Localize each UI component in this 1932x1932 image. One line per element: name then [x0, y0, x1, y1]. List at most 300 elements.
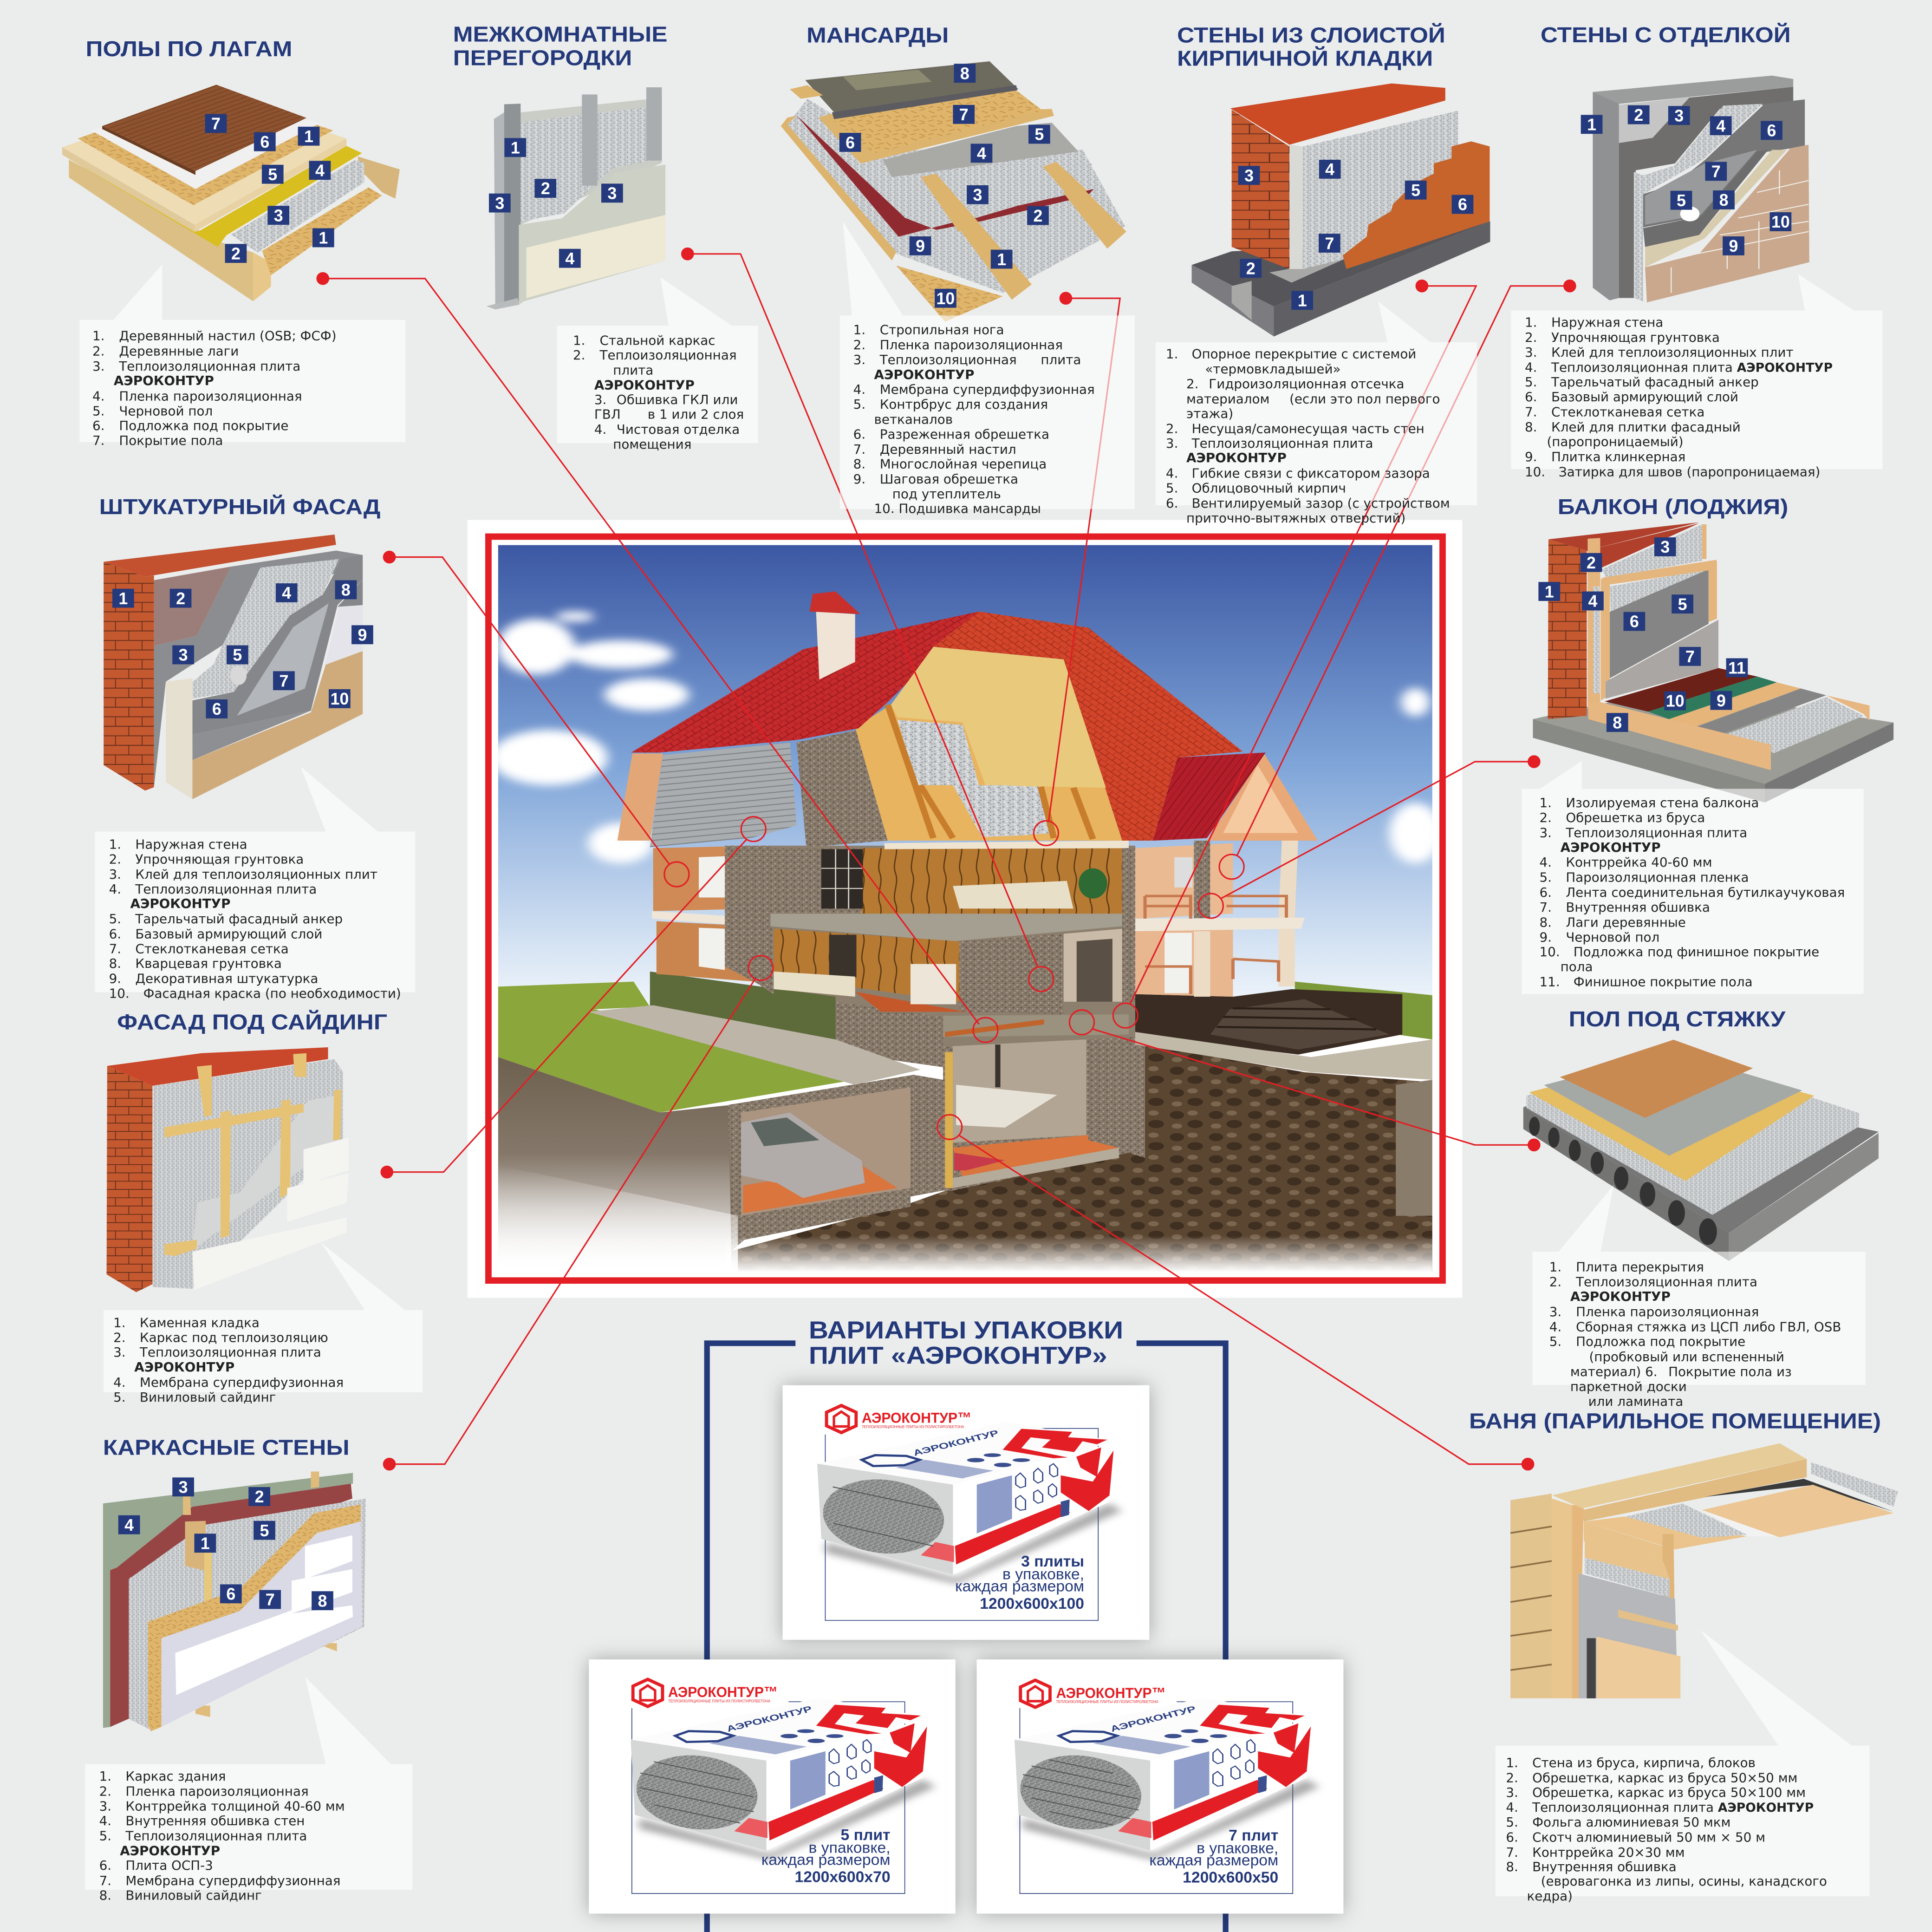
callout legend: 6.	[99, 1858, 111, 1873]
card: 7 плит: 1200x600x50	[1183, 1869, 1278, 1886]
layer number badges: 2	[541, 179, 550, 198]
layer number badges: 8	[960, 64, 969, 83]
heading	[1177, 23, 1445, 70]
connector: мансарды	[1034, 293, 1120, 845]
callout legend: 9.	[853, 471, 865, 487]
card: 3 плиты: каждая размером	[955, 1577, 1084, 1595]
card: 5 плит: АЭРОКОНТУР™	[668, 1684, 778, 1700]
callout legend: 6.	[1525, 389, 1537, 405]
layer number badges: 7	[279, 672, 288, 690]
callout legend: 4.	[113, 1375, 126, 1390]
callout legend: 5.	[1506, 1815, 1518, 1830]
layer number badges: 3	[973, 186, 982, 204]
callout legend: Вентилируемый зазор (с устройством	[1192, 496, 1450, 511]
callout legend: 6.	[853, 427, 865, 442]
callout legend: 3.	[853, 352, 865, 367]
layer number badges: 3	[495, 194, 504, 213]
callout legend: АЭРОКОНТУР	[874, 367, 974, 382]
callout legend: Подложка под финишное покрытие	[1574, 944, 1819, 959]
panel: пол под стяжку	[1523, 1007, 1879, 1409]
callout legend: 8.	[109, 956, 121, 971]
callout legend: 7.	[99, 1873, 111, 1888]
layer number badges: 1	[1298, 291, 1307, 310]
callout legend: 9.	[1540, 929, 1552, 945]
callout legend: Фасадная краска (по необходимости)	[143, 986, 401, 1001]
callout legend: 2.	[1186, 376, 1198, 392]
callout legend: Разреженная обрешетка	[880, 427, 1049, 442]
callout legend: Контррейка толщиной 40-60 мм	[125, 1798, 345, 1814]
callout legend	[557, 277, 758, 452]
callout legend: Подложка под покрытие	[119, 418, 288, 433]
heading: МЕЖКОМНАТНЫЕ	[453, 22, 668, 46]
callout legend: под утеплитель	[892, 486, 1001, 502]
callout legend: или ламината	[1588, 1394, 1683, 1409]
callout legend: Упрочняющая грунтовка	[1551, 330, 1720, 345]
callout legend: 3.	[113, 1345, 126, 1360]
layer number badges: 5	[1034, 125, 1044, 144]
callout legend	[1532, 1185, 1866, 1409]
connector: баня	[937, 1115, 1534, 1470]
callout legend	[95, 767, 415, 1001]
layer number badges: 5	[233, 646, 242, 665]
callout legend: 5.	[109, 911, 121, 927]
layer number badges: 10	[330, 690, 349, 708]
layer number badges: 7	[1685, 647, 1695, 666]
callout legend: 1.	[1540, 795, 1552, 810]
layer number badges: 2	[1634, 106, 1643, 124]
card: 5 плит: 5 плит	[841, 1826, 891, 1844]
callout legend: 4.	[1506, 1800, 1518, 1815]
panel: варианты упаковки	[589, 1317, 1343, 1932]
callout legend: АЭРОКОНТУР	[130, 896, 230, 911]
callout legend: (если это пол первого	[1289, 392, 1440, 407]
callout legend: 5.	[1549, 1334, 1561, 1349]
callout legend: 6.	[1166, 496, 1178, 511]
callout legend: Теплоизоляционная плита	[118, 359, 300, 374]
callout legend: кедра)	[1527, 1888, 1573, 1904]
callout legend: 3.	[92, 359, 105, 374]
callout legend: паркетной доски	[1570, 1379, 1687, 1394]
card: 7 плит	[977, 1659, 1343, 1913]
callout legend: АЭРОКОНТУР	[1718, 1801, 1814, 1815]
callout legend: 3.	[109, 867, 121, 882]
callout legend: Теплоизоляционная плита	[1575, 1274, 1757, 1289]
connector: межкомнатные перегородки	[682, 248, 1054, 992]
callout legend: 3.	[1166, 436, 1178, 451]
callout legend: Контрбрус для создания	[880, 397, 1048, 412]
layer number badges	[1581, 105, 1791, 255]
callout legend: 7.	[92, 433, 105, 448]
heading: КИРПИЧНОЙ КЛАДКИ	[1177, 46, 1433, 70]
house cutaway picture	[490, 545, 1441, 1272]
callout legend: АЭРОКОНТУР	[1186, 450, 1287, 465]
callout legend	[1511, 274, 1882, 479]
layer number badges: 1	[118, 589, 128, 608]
callout legend: Клей для теплоизоляционных плит	[1551, 345, 1794, 360]
callout legend: приточно-вытяжных отверстий)	[1186, 510, 1405, 526]
layer number badges: 6	[846, 133, 855, 152]
callout legend: плита	[1041, 352, 1081, 367]
panel: фасад под сайдинг	[104, 1010, 423, 1405]
callout legend: «термовкладышей»	[1205, 361, 1341, 377]
callout legend: 2.	[99, 1783, 111, 1799]
card: 3 плиты: 1200x600x100	[980, 1595, 1084, 1612]
illustration: attic roof layers	[781, 61, 1126, 322]
callout legend: Стеклотканевая сетка	[135, 941, 289, 956]
layer number badges: 6	[1767, 122, 1776, 140]
layer number badges: 4	[1716, 117, 1725, 135]
connector: штукатурный фасад	[384, 551, 689, 887]
card: 3 плиты: 3 плиты	[1021, 1553, 1084, 1570]
callout legend: 3.	[1525, 345, 1537, 360]
callout legend	[85, 1677, 412, 1903]
layer number badges: 2	[176, 589, 185, 608]
callout legend: Обрешетка, каркас из бруса 50×50 мм	[1532, 1770, 1797, 1785]
callout legend: Наружная стена	[1551, 315, 1663, 330]
callout legend: Деревянный настил	[880, 442, 1016, 457]
callout legend: 5.	[853, 397, 865, 412]
callout legend: 2.	[1166, 421, 1178, 436]
connector: стены из слоистой кладки	[1113, 280, 1476, 1028]
layer number badges: 3	[274, 206, 283, 225]
layer number badges: 1	[1587, 116, 1596, 134]
callout legend: 4.	[99, 1813, 111, 1828]
callout legend: Тарельчатый фасадный анкер	[135, 911, 343, 927]
layer number badges: 9	[358, 626, 367, 644]
callout legend: Каменная кладка	[140, 1315, 260, 1331]
callout legend: Плитка клинкерная	[1551, 449, 1685, 464]
callout legend: помещения	[613, 437, 691, 452]
heading: ПОЛЫ ПО ЛАГАМ	[86, 37, 292, 61]
layer number badges: 7	[1711, 163, 1721, 181]
callout legend: 2.	[1540, 810, 1552, 825]
panel: стены с отделкой	[1511, 23, 1882, 479]
card: 7 плит: АЭРОКОНТУР™	[1056, 1684, 1166, 1701]
layer number badges	[489, 138, 623, 268]
callout legend: Клей для теплоизоляционных плит	[135, 867, 377, 882]
layer number badges: 7	[1325, 234, 1334, 253]
card: 5 плит: каждая размером	[761, 1851, 891, 1869]
illustration: sauna	[1510, 1443, 1898, 1698]
callout legend	[79, 265, 405, 448]
callout legend: 1.	[99, 1769, 111, 1784]
callout legend: Декоративная штукатурка	[135, 971, 318, 986]
callout legend: Теплоизоляционная плита	[135, 881, 317, 897]
callout legend: Покрытие пола	[119, 433, 223, 448]
callout legend: 1.	[109, 836, 121, 852]
layer number badges: 3	[1660, 538, 1670, 556]
callout legend: Наружная стена	[135, 836, 247, 852]
layer number badges: 4	[1325, 160, 1334, 179]
layer number badges: 3	[1674, 106, 1684, 125]
illustration: layered brick wall	[1192, 84, 1490, 336]
layer number badges: 1	[997, 250, 1006, 269]
callout legend: Кварцевая грунтовка	[135, 956, 282, 971]
illustration: finished wall	[1593, 76, 1809, 302]
heading: ШТУКАТУРНЫЙ ФАСАД	[99, 495, 380, 519]
callout legend: Скотч алюминиевый 50 мм × 50 м	[1532, 1829, 1765, 1845]
callout legend: Мембрана супердиффузионная	[880, 382, 1095, 397]
callout legend: 1.	[1525, 315, 1537, 330]
callout legend: АЭРОКОНТУР	[1561, 840, 1661, 855]
layer number badges: 11	[1728, 659, 1746, 678]
layer number badges: 3	[179, 646, 188, 665]
callout legend: Пленка пароизоляционная	[125, 1783, 309, 1799]
callout legend: Чистовая отделка	[617, 422, 740, 437]
callout legend: 10.	[109, 986, 130, 1001]
layer number badges: 2	[255, 1488, 264, 1506]
callout legend: Плита ОСП-3	[125, 1858, 213, 1873]
callout legend: Стальной каркас	[600, 333, 716, 348]
callout legend: (евровагонка из липы, осины, канадского	[1541, 1873, 1827, 1889]
layer number badges: 1	[511, 138, 520, 157]
heading: ФАСАД ПОД САЙДИНГ	[117, 1010, 387, 1034]
layer number badges: 2	[1246, 259, 1255, 278]
layer number badges: 2	[1034, 207, 1042, 225]
card: 5 плит: ТЕПЛОИЗОЛЯЦИОННЫЕ ПЛИТЫ ИЗ ПОЛИСТИРОЛБЕТОНА	[668, 1699, 771, 1703]
callout legend	[1522, 761, 1864, 994]
callout legend: 1.	[1549, 1259, 1561, 1274]
callout legend: Пленка пароизоляционная	[880, 337, 1063, 352]
layer number badges: 8	[1719, 191, 1728, 209]
callout legend: Подложка под покрытие	[1576, 1334, 1745, 1349]
layer number badges: 2	[1587, 554, 1596, 572]
callout legend: 1.	[92, 328, 105, 343]
callout legend: 6.	[109, 926, 121, 941]
illustration: floor layers	[62, 85, 400, 301]
heading: МАНСАРДЫ	[807, 23, 949, 47]
layer number badges: 4	[282, 584, 291, 602]
layer number badges: 6	[212, 700, 221, 718]
panel: мансарды	[781, 23, 1135, 516]
card: 3 плиты: АЭРОКОНТУР™	[862, 1410, 971, 1426]
panel: балкон (лоджия)	[1522, 495, 1893, 994]
illustration: balcony	[1533, 522, 1893, 803]
callout legend: 1.	[573, 333, 585, 348]
heading: КАРКАСНЫЕ СТЕНЫ	[103, 1435, 350, 1459]
callout legend: Внутренняя обшивка	[1532, 1859, 1677, 1874]
heading: ПЕРЕГОРОДКИ	[453, 46, 632, 70]
panel: central house illustration	[468, 520, 1462, 1298]
callout legend: Базовый армирующий слой	[1551, 389, 1738, 405]
callout legend: Обрешетка из бруса	[1566, 810, 1705, 825]
card: 7 плит: в упаковке,	[1197, 1839, 1278, 1857]
callout legend: Теплоизоляционная плита	[125, 1828, 307, 1844]
callout legend: 2.	[113, 1330, 126, 1345]
layer number badges: 1	[201, 1534, 210, 1553]
callout legend: 2.	[109, 852, 121, 867]
callout legend: Теплоизоляционная плита	[139, 1345, 321, 1360]
layer number badges: 6	[260, 133, 269, 151]
callout legend: АЭРОКОНТУР	[1737, 360, 1833, 375]
callout legend: 4.	[853, 382, 865, 397]
callout legend: Базовый армирующий слой	[135, 926, 322, 941]
callout legend: Лаги деревянные	[1566, 914, 1686, 930]
layer number badges: 9	[1729, 237, 1738, 255]
callout legend: Пленка пароизоляционная	[1576, 1304, 1759, 1319]
callout legend: 8.	[1525, 419, 1537, 435]
layer number badges: 4	[315, 162, 325, 180]
callout legend: 5.	[1540, 869, 1552, 885]
callout legend: 8.	[1506, 1859, 1518, 1874]
illustration: frame wall	[103, 1472, 366, 1731]
layer number badges: 5	[1411, 181, 1420, 200]
callout legend: АЭРОКОНТУР	[594, 378, 695, 393]
connector: фасад под сайдинг	[381, 817, 766, 1178]
callout legend: 2.	[1525, 330, 1537, 345]
callout legend: Деревянные лаги	[119, 344, 239, 359]
layer number badges	[1538, 537, 1748, 732]
callout legend: Гибкие связи с фиксатором зазора	[1192, 465, 1430, 481]
packaging heading: ПЛИТ «АЭРОКОНТУР»	[809, 1342, 1107, 1370]
callout legend: Пленка пароизоляционная	[119, 388, 302, 404]
callout legend: 3.	[1540, 825, 1552, 840]
layer number badges: 6	[1630, 613, 1639, 631]
callout legend: Виниловый сайдинг	[140, 1390, 276, 1405]
callout legend	[840, 222, 1135, 516]
callout legend: Теплоизоляционная плита	[1191, 436, 1373, 451]
callout legend: Контррейка 20×30 мм	[1532, 1845, 1685, 1860]
connector: балкон	[1198, 756, 1540, 918]
callout legend: 2.	[1549, 1274, 1561, 1289]
callout legend: 1.	[853, 322, 865, 338]
callout legend: Теплоизоляционная плита	[1565, 825, 1747, 840]
callout legend: 9.	[109, 971, 121, 986]
callout legend: 3.	[1549, 1304, 1561, 1319]
layer number badges: 3	[1244, 166, 1254, 185]
heading: СТЕНЫ С ОТДЕЛКОЙ	[1541, 23, 1791, 47]
callout legend	[1156, 301, 1477, 526]
layer number badges: 5	[260, 1521, 269, 1540]
callout legend: 10.	[1525, 464, 1545, 479]
callout legend: 1.	[1166, 346, 1178, 362]
callout legend: Несущая/самонесущая часть стен	[1192, 421, 1425, 436]
card: 5 плит: 1200x600x70	[794, 1868, 891, 1886]
layer number badges: 1	[1545, 582, 1554, 601]
callout legend: Многослойная черепица	[880, 456, 1047, 471]
layer number badges: 7	[266, 1591, 275, 1609]
callout legend: Шаговая обрешетка	[880, 471, 1018, 487]
callout legend: Фольга алюминиевая 50 мкм	[1532, 1815, 1730, 1830]
illustration: partition wall	[487, 87, 665, 309]
callout legend: 4.	[1549, 1319, 1561, 1334]
callout legend: ГВЛ	[594, 406, 621, 422]
callout legend: Мембрана супердиффузионная	[125, 1873, 340, 1888]
layer number badges: 5	[1677, 191, 1686, 210]
heading: ПОЛ ПОД СТЯЖКУ	[1569, 1007, 1786, 1031]
layer number badges: 6	[1458, 196, 1467, 214]
layer number badges	[118, 1477, 333, 1610]
panel: полы по лагам	[62, 37, 405, 448]
callout legend: 5.	[113, 1390, 126, 1405]
callout legend: 1.	[1506, 1755, 1518, 1770]
callout legend: Изолируемая стена балкона	[1566, 795, 1759, 810]
card: 7 плит: ТЕПЛОИЗОЛЯЦИОННЫЕ ПЛИТЫ ИЗ ПОЛИСТИРОЛБЕТОНА	[1056, 1700, 1158, 1704]
layer number badges: 4	[124, 1516, 134, 1534]
callout legend: 4.	[1525, 359, 1537, 375]
callout legend: 4.	[594, 422, 606, 437]
panel: стены из слоистой кирпичной кладки	[1156, 23, 1490, 526]
layer number badges: 1	[304, 127, 313, 146]
callout legend: Обшивка ГКЛ или	[617, 392, 738, 407]
callout legend: 6.	[1506, 1829, 1518, 1845]
callout legend: Черновой пол	[119, 403, 213, 418]
layer number badges: 9	[1717, 692, 1726, 710]
layer number badges: 9	[916, 237, 925, 255]
connector: пол под стяжку	[1069, 1010, 1540, 1151]
callout legend: (паропроницаемый)	[1547, 434, 1684, 450]
callout legend: Теплоизоляционная плита	[1532, 1800, 1718, 1815]
callout legend: Стропильная нога	[880, 322, 1004, 338]
callout legend: Сборная стяжка из ЦСП либо ГВЛ, OSB	[1576, 1319, 1841, 1334]
callout legend: Пароизоляционная пленка	[1566, 869, 1749, 885]
callout legend: Финишное покрытие пола	[1574, 974, 1753, 990]
callout legend: Плита перекрытия	[1576, 1259, 1704, 1274]
callout legend: Черновой пол	[1566, 929, 1659, 945]
callout legend: Затирка для швов (паропроницаемая)	[1559, 464, 1820, 479]
callout legend: Обрешетка, каркас из бруса 50×100 мм	[1532, 1785, 1806, 1800]
callout legend: Лента соединительная бутилкаучуковая	[1566, 885, 1845, 900]
callout legend: 4.	[109, 881, 121, 897]
layer number badges: 10	[1666, 692, 1685, 711]
callout legend	[1496, 1630, 1869, 1904]
callout legend: 3.	[99, 1798, 111, 1814]
card: 3 плиты	[783, 1385, 1149, 1640]
callout legend: Покрытие пола из	[1668, 1364, 1792, 1379]
callout legend: Теплоизоляционная плита	[1551, 359, 1737, 375]
callout legend: 2.	[92, 344, 105, 359]
callout legend: материалом	[1186, 392, 1269, 407]
heading: СТЕНЫ ИЗ СЛОИСТОЙ	[1177, 23, 1445, 47]
callout legend: Тарельчатый фасадный анкер	[1551, 374, 1759, 390]
callout legend: Опорное перекрытие с системой	[1192, 346, 1416, 362]
connector lines with dots and house markers	[317, 248, 1575, 1470]
card: 3 плиты: ТЕПЛОИЗОЛЯЦИОННЫЕ ПЛИТЫ ИЗ ПОЛИСТИРОЛБЕТОНА	[862, 1425, 964, 1429]
layer number badges: 8	[341, 581, 351, 600]
heading	[453, 22, 668, 70]
layer number badges: 10	[937, 289, 955, 308]
layer number badges: 7	[959, 105, 969, 124]
callout legend: Стеклотканевая сетка	[1551, 404, 1704, 419]
callout legend: 8.	[853, 456, 865, 471]
callout legend	[104, 1243, 423, 1405]
callout legend: Клей для плитки фасадный	[1551, 419, 1741, 435]
connector: стены с отделкой	[1219, 280, 1575, 879]
connector: каркасные стены	[384, 956, 773, 1470]
layer number badges: 10	[1771, 213, 1790, 231]
card: 3 плиты: в упаковке,	[1002, 1565, 1084, 1583]
callout legend: 4.	[1166, 465, 1178, 481]
callout legend: 6.	[1540, 885, 1552, 900]
callout legend: АЭРОКОНТУР	[114, 373, 214, 388]
callout legend: 5.	[99, 1828, 111, 1844]
layer number badges: 1	[319, 229, 328, 248]
heading: БАНЯ (ПАРИЛЬНОЕ ПОМЕЩЕНИЕ)	[1469, 1409, 1881, 1433]
panel: баня (парильное помещение)	[1469, 1409, 1898, 1904]
layer number badges: 3	[179, 1478, 188, 1496]
callout legend: 8.	[1540, 914, 1552, 930]
layer number badges	[1238, 160, 1473, 310]
callout legend: 9.	[1525, 449, 1537, 464]
layer number badges: 7	[211, 115, 221, 133]
layer number badges: 2	[231, 244, 241, 263]
panel: межкомнатные перегородки	[453, 22, 758, 452]
callout legend: 10.	[1540, 944, 1560, 959]
card: 7 плит: 7 плит	[1229, 1827, 1278, 1844]
callout legend: Упрочняющая грунтовка	[135, 852, 304, 867]
callout legend: 7.	[1506, 1845, 1518, 1860]
layer number badges: 3	[607, 184, 617, 203]
